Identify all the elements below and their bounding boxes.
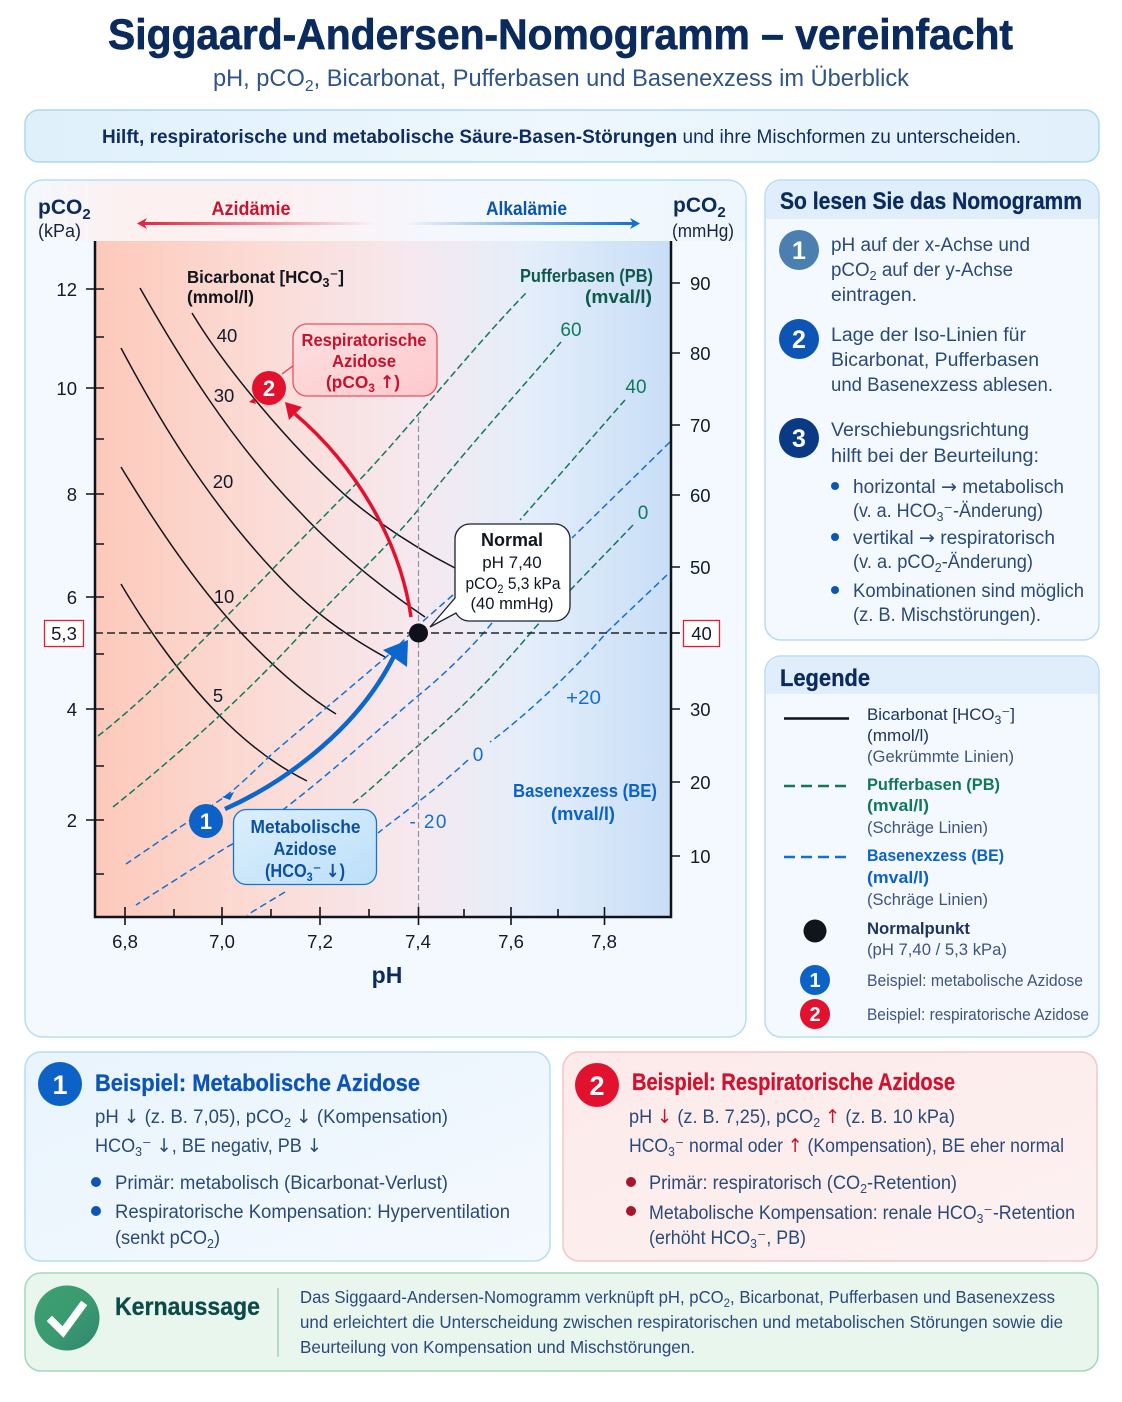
panel: key message (25, 1273, 1098, 1371)
values: ↓ (Kompensation) (296, 1106, 451, 1128)
legend: bicarbonate: (mmol/l) (867, 727, 929, 745)
alkalaemie arrow (405, 199, 640, 229)
key message text: und erleichtert die Unterscheidung zwischen respiratorischen und metabolischen Störungen sowie die (300, 1312, 1063, 1332)
basenexzess values: 0 (473, 745, 483, 766)
left axis title: (kPa) (38, 221, 81, 241)
marker 1: 1 (200, 809, 212, 834)
right axis labels: 60 (690, 485, 711, 506)
legend: basenexzess: Basenexzess (BE) (867, 847, 1004, 865)
left axis title: pCO (38, 196, 82, 219)
legend: normal point: Normalpunkt (867, 920, 971, 938)
bullets: (senkt pCO (115, 1228, 211, 1249)
bullets: 2 (860, 1181, 867, 1196)
callout: metabolic acidosis (234, 810, 376, 884)
x axis labels: 7,2 (307, 931, 333, 952)
callout: respiratory acidosis: 3 (368, 381, 375, 395)
right axis labels: 20 (690, 772, 711, 793)
legend: bicarbonate: (Gekrümmte Linien) (867, 748, 1014, 766)
step 3 bullets: (v. a. pCO (853, 552, 938, 573)
callout: metabolic acidosis: 3 (307, 870, 313, 884)
right axis title: 2 (717, 204, 726, 221)
legend: pufferbasen (784, 776, 1000, 837)
bullets (91, 1173, 510, 1251)
bicarbonate values: 5 (213, 685, 223, 706)
x axis title: pH (372, 962, 402, 988)
right axis labels: 80 (690, 343, 711, 364)
values: pH ↓ (z. B. 7,05), pCO (95, 1106, 287, 1128)
left axis title: 2 (82, 206, 91, 223)
banner: Hilft, respiratorische und metabolische Säure-Basen-Störungen und ihre Mischformen zu unterscheiden. (102, 127, 1021, 148)
values (95, 1106, 448, 1159)
callout: normal: pH 7,40 (482, 553, 542, 572)
callout: normal: pCO (466, 574, 500, 593)
icon: check mark (34, 1286, 100, 1350)
legend: pufferbasen: (Schräge Linien) (867, 819, 988, 837)
basenexzess label (513, 781, 657, 824)
callout: respiratory acidosis: Azidose (332, 351, 396, 371)
key message text: , Bicarbonat, Pufferbasen und Basenexzess (730, 1287, 1055, 1307)
values: HCO (629, 1136, 671, 1157)
legend: example 1 (800, 965, 1083, 995)
bicarbonate values: 20 (213, 471, 233, 492)
normal point (409, 624, 428, 642)
step 3 (779, 418, 1039, 467)
step 3: Verschiebungsrichtung (831, 420, 1029, 441)
right axis title: pCO (673, 194, 717, 217)
key message text (300, 1287, 1063, 1357)
bicarbonate label: Bicarbonat [HCO (187, 267, 328, 287)
axis ticks (86, 283, 680, 925)
bullets: Metabolische Kompensation: renale HCO (649, 1203, 999, 1224)
values: ↑ (Kompensation), BE eher normal (788, 1135, 1085, 1157)
legend: pufferbasen: Pufferbasen (PB) (867, 776, 1000, 794)
callout: respiratory acidosis: (pCO (326, 372, 369, 392)
callout: normal: Normal (481, 530, 543, 550)
pufferbasen values (560, 320, 648, 524)
callout: normal: 2 (497, 582, 504, 596)
step 3: 3 (792, 425, 806, 453)
azidaemie arrow (137, 199, 375, 229)
callout: metabolic acidosis: Azidose (274, 839, 336, 859)
basenexzess values (410, 688, 601, 833)
bullets: ⁻, PB) (757, 1228, 806, 1249)
value box 40: 40 (691, 623, 712, 644)
right axis labels: 10 (690, 846, 711, 867)
bicarbonate label (187, 267, 344, 307)
bicarbonate values: 40 (217, 325, 237, 346)
bullets: 2 (207, 1236, 214, 1251)
step 1 (779, 230, 1030, 306)
pufferbasen label (520, 266, 653, 307)
step 3 bullets: -Änderung) (942, 552, 1033, 573)
bicarbonate curves (121, 288, 455, 781)
legend: example 1: 1 (809, 970, 821, 992)
values: HCO (95, 1136, 137, 1157)
key message text: Das Siggaard-Andersen-Nomogramm verknüpft pH, pCO (300, 1287, 744, 1307)
values: 2 (284, 1115, 291, 1130)
value box 5,3: 5,3 (51, 623, 77, 644)
values: ⁻ (142, 1136, 157, 1157)
bicarbonate label: 3 (323, 275, 330, 290)
bullets: 3 (977, 1211, 983, 1226)
values: ↑ (z. B. 10 kPa) (825, 1106, 961, 1128)
badge 2 (575, 1063, 619, 1107)
legend: example 1: Beispiel: metabolische Azidose (867, 972, 1083, 990)
right axis labels: 90 (690, 273, 711, 294)
alkalaemie arrow: Alkalämie (486, 199, 567, 220)
callout: respiratory acidosis: ↑) (380, 372, 400, 393)
axes (95, 241, 671, 917)
bicarbonate values: 10 (214, 586, 234, 607)
step 3 bullets: Kombinationen sind möglich (853, 581, 1084, 602)
left axis labels: 4 (67, 699, 77, 720)
value box 5,3 (44, 620, 84, 646)
step 2 (779, 319, 1053, 396)
right axis labels: 30 (690, 699, 711, 720)
badge 2: 2 (589, 1071, 605, 1101)
values: ⁻ normal oder (675, 1136, 788, 1157)
step 3 bullets: (z. B. Mischstörungen). (853, 605, 1041, 626)
bullets: ) (214, 1228, 220, 1249)
step 3 bullets: horizontal → metabolisch (853, 476, 1064, 498)
right axis labels: 70 (690, 415, 711, 436)
left axis labels (56, 279, 77, 831)
values: pH ↓ (z. B. 7,25), pCO (629, 1106, 820, 1128)
legend: bicarbonate (784, 706, 1015, 766)
pufferbasen label: (mval/l) (585, 287, 652, 307)
left axis title (38, 196, 91, 241)
left axis labels: 12 (56, 279, 77, 300)
callout: metabolic acidosis: (HCO (265, 861, 311, 881)
panel: respiratory example (563, 1052, 1097, 1261)
legend: basenexzess (784, 847, 1004, 909)
bicarbonate values: 30 (214, 385, 234, 406)
bullets: Primär: metabolisch (Bicarbonat-Verlust) (115, 1173, 448, 1194)
left axis labels: 8 (67, 484, 77, 505)
values: ↓, BE negativ, PB ↓ (157, 1135, 323, 1157)
bullets (626, 1173, 1075, 1251)
legend: basenexzess: (mval/l) (867, 869, 929, 887)
basenexzess values: - 20 (410, 812, 446, 833)
right axis title: (mmHg) (672, 221, 734, 241)
x axis labels: 7,8 (591, 931, 617, 952)
callout: metabolic acidosis: ↓) (326, 861, 346, 882)
arrow: respiratory acidosis (285, 402, 411, 617)
pufferbasen values: 0 (638, 503, 648, 524)
legend: normal point (804, 920, 1007, 959)
legend: bicarbonate: 3 (995, 713, 1002, 727)
heading: Beispiel: Metabolische Azidose (95, 1070, 420, 1097)
callout: respiratory acidosis: Respiratorische (302, 330, 427, 350)
legend heading: Legende (780, 665, 870, 692)
plot background (95, 241, 671, 917)
legend: normal point: (pH 7,40 / 5,3 kPa) (867, 941, 1007, 959)
left axis labels: 6 (67, 587, 77, 608)
bicarbonate label: (mmol/l) (187, 287, 254, 307)
value box 40 (684, 620, 720, 646)
banner (25, 110, 1099, 162)
step 3 bullets (831, 476, 1084, 626)
legend: bicarbonate: ⁻] (1001, 706, 1015, 724)
panel: nomogram chart (25, 180, 746, 1037)
legend: example 2 (800, 999, 1089, 1029)
callout: normal (430, 524, 570, 627)
legend: pufferbasen: (mval/l) (867, 797, 929, 815)
panel: legend (765, 656, 1099, 1037)
bullets: Respiratorische Kompensation: Hyperventilation (115, 1202, 510, 1223)
x axis labels: 6,8 (112, 931, 138, 952)
legend: basenexzess: (Schräge Linien) (867, 891, 988, 909)
x axis labels: 7,4 (405, 931, 431, 952)
step 2: 2 (792, 326, 806, 354)
right axis labels: 50 (690, 557, 711, 578)
step 2: und Basenexzess ablesen. (831, 375, 1053, 396)
callout: metabolic acidosis: ⁻ (313, 861, 326, 881)
bullets: ⁻-Retention (983, 1203, 1075, 1224)
title: Siggaard-Andersen-Nomogramm – vereinfacht (108, 11, 1013, 59)
step 3 bullets: (v. a. HCO (853, 501, 941, 522)
bicarbonate label: ⁻] (330, 267, 344, 287)
pufferbasen values: 40 (625, 377, 647, 398)
basenexzess lines (126, 442, 670, 915)
panel: how to read (765, 180, 1099, 640)
step 2: Lage der Iso-Linien für (831, 325, 1027, 346)
heading: Beispiel: Respiratorische Azidose (632, 1069, 955, 1096)
left axis labels: 2 (67, 810, 77, 831)
step 1: 2 (870, 268, 877, 283)
step 1: pH auf der x-Achse und (831, 235, 1030, 256)
callout: normal: (40 mmHg) (470, 594, 554, 613)
bicarbonate values (213, 325, 237, 706)
left axis labels: 10 (56, 378, 77, 399)
callout: metabolic acidosis: Metabolische (250, 817, 360, 837)
callout: respiratory acidosis (249, 324, 437, 404)
step 3 bullets: ⁻-Änderung) (943, 501, 1043, 522)
bullets: Primär: respiratorisch (CO (649, 1173, 870, 1194)
step 1: auf der y-Achse (877, 260, 1013, 281)
values (629, 1106, 1064, 1159)
badge 1: 1 (52, 1070, 68, 1100)
key message text: 2 (724, 1296, 730, 1310)
step 1: pCO (831, 260, 870, 281)
basenexzess values: +20 (566, 688, 601, 709)
x axis labels (112, 931, 617, 952)
step 3: hilft bei der Beurteilung: (831, 446, 1039, 467)
x axis labels: 7,0 (209, 931, 235, 952)
basenexzess label: (mval/l) (551, 804, 615, 824)
bullets: -Retention) (867, 1173, 957, 1194)
bullets: 3 (750, 1236, 757, 1251)
values: 3 (135, 1144, 142, 1159)
step 3 bullets: 2 (935, 560, 942, 575)
azidaemie arrow: Azidämie (212, 199, 290, 220)
step 3 bullets: 3 (937, 509, 943, 524)
pufferbasen label: Pufferbasen (PB) (520, 266, 653, 286)
subtitle: 2 (305, 78, 314, 95)
right axis title (672, 194, 734, 241)
key message heading: Kernaussage (115, 1293, 260, 1321)
panel: metabolic example (25, 1052, 550, 1261)
step 1: 1 (792, 237, 806, 265)
legend: example 2: Beispiel: respiratorische Azidose (867, 1006, 1089, 1024)
pufferbasen values: 60 (560, 320, 582, 341)
pufferbasen lines (98, 292, 633, 807)
key message text: Beurteilung von Kompensation und Mischstörungen. (300, 1337, 695, 1357)
step 1: eintragen. (831, 285, 917, 306)
marker 1 (189, 804, 223, 838)
subtitle: pH, pCO (213, 65, 306, 92)
subtitle: , Bicarbonat, Pufferbasen und Basenexzess im Überblick (314, 65, 910, 92)
step 2: Bicarbonat, Pufferbasen (831, 350, 1039, 371)
values: 2 (813, 1115, 820, 1130)
values: 3 (668, 1144, 675, 1159)
step 3 bullets: vertikal → respiratorisch (853, 527, 1055, 549)
right axis labels (690, 273, 711, 867)
normal reference lines (95, 417, 680, 917)
legend: bicarbonate: Bicarbonat [HCO (867, 706, 992, 724)
legend: example 2: 2 (809, 1004, 821, 1026)
marker 2: 2 (263, 376, 275, 401)
badge 1 (38, 1062, 82, 1106)
how to read heading: So lesen Sie das Nomogramm (780, 188, 1082, 215)
arrow: metabolic acidosis (222, 640, 408, 809)
callout: normal: 5,3 kPa (504, 574, 561, 593)
bullets: (erhöht HCO (649, 1228, 757, 1249)
marker 2 (252, 371, 286, 405)
basenexzess label: Basenexzess (BE) (513, 781, 657, 801)
x axis labels: 7,6 (498, 931, 524, 952)
